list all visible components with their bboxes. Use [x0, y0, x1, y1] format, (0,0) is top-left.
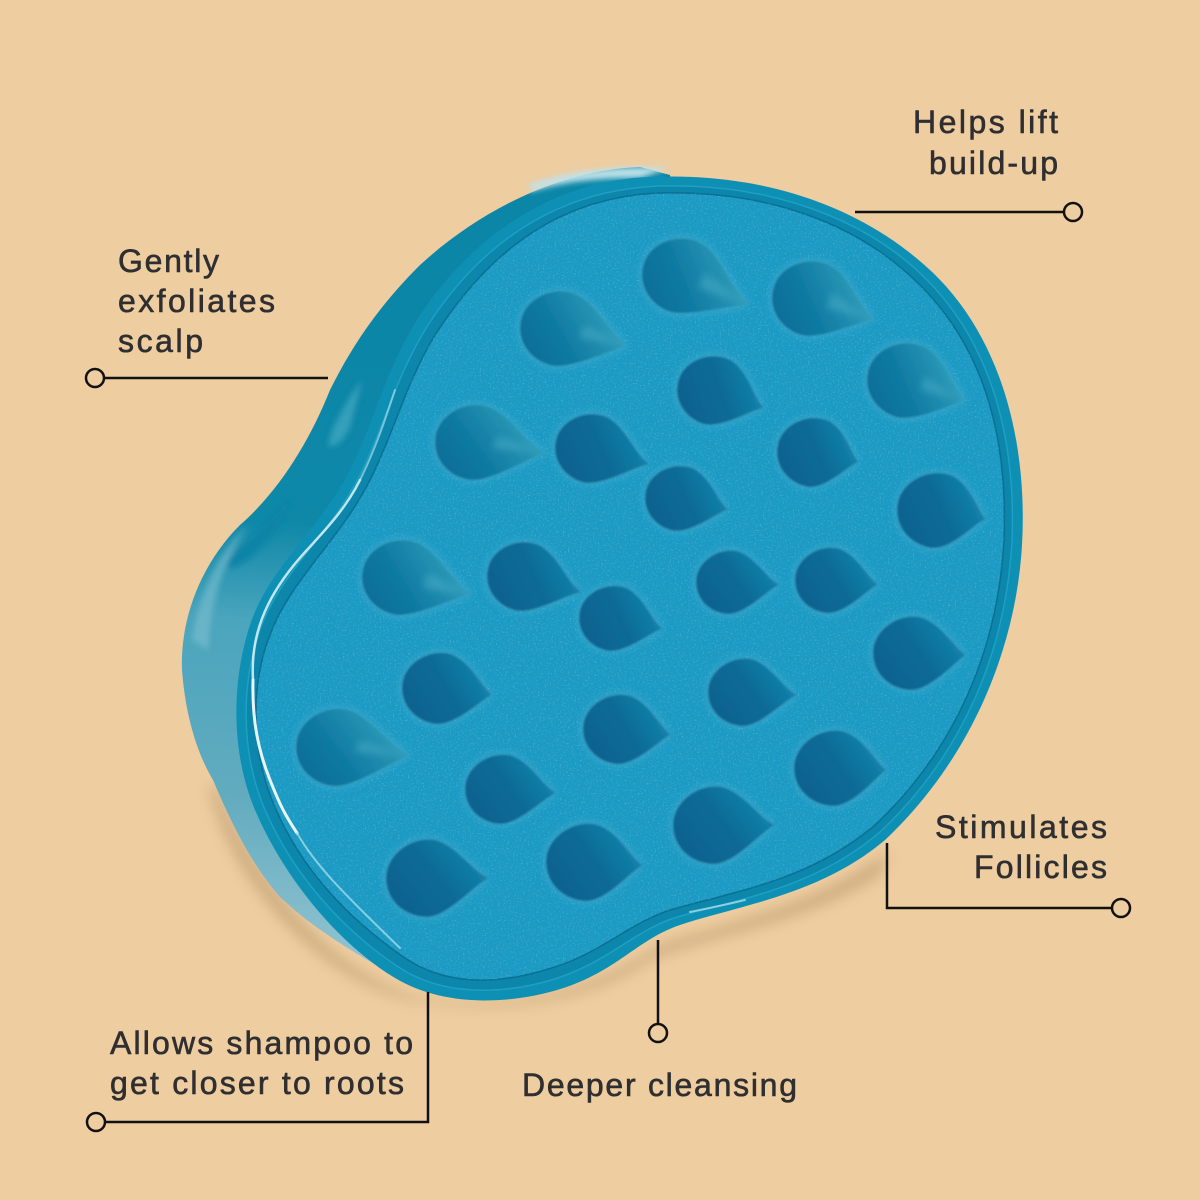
spike 1 [630, 225, 765, 340]
rim highlights [253, 390, 745, 948]
spike 16 [872, 615, 967, 692]
spike 17 [398, 648, 496, 730]
spike 7 [547, 405, 658, 498]
spike 3 [512, 282, 637, 382]
spike 2 [762, 250, 887, 355]
callout: allows shampoo closer to roots [87, 992, 428, 1131]
callout text [110, 1025, 413, 1101]
spike 21 [463, 752, 558, 828]
rim inner groove [246, 186, 1012, 990]
callout text: Allows shampoo to [110, 1025, 413, 1061]
spikes [292, 225, 992, 917]
spike 12 [479, 533, 590, 626]
spike 8 [770, 411, 865, 496]
callout text [913, 104, 1058, 181]
spike 23 [673, 786, 774, 864]
brush side wall [182, 167, 700, 985]
callout text: scalp [118, 323, 203, 359]
callout text: Helps lift [913, 104, 1058, 140]
leader line [887, 843, 1112, 908]
callout text: Follicles [974, 849, 1107, 885]
callout text: exfoliates [118, 283, 275, 319]
leader line [855, 211, 1064, 213]
callout text [935, 809, 1107, 885]
spike 5 [668, 346, 775, 441]
callout text: get closer to roots [110, 1065, 404, 1101]
spike 9 [638, 459, 735, 542]
brush: shampoo scalp massager [182, 167, 1023, 1006]
spike 11 [354, 532, 481, 631]
callout text: Stimulates [935, 809, 1107, 845]
spike 14 [792, 544, 880, 617]
spike 25 [544, 821, 644, 904]
leader line [657, 940, 659, 1024]
spike 13 [694, 549, 781, 617]
leader dot [87, 1113, 105, 1131]
face speckle texture [240, 180, 1020, 990]
rim [236, 177, 1023, 1000]
callout: deeper cleansing [522, 940, 797, 1103]
side wall highlight [192, 167, 670, 650]
spike 24 [386, 839, 488, 917]
spike 4 [857, 332, 978, 436]
brush shadow [210, 780, 890, 1006]
spike 18 [706, 656, 798, 729]
spike 10 [891, 466, 992, 556]
callout text: Deeper cleansing [522, 1067, 797, 1103]
leader dot [1112, 899, 1130, 917]
leader dot [649, 1024, 667, 1042]
leader dot [1064, 203, 1082, 221]
callout: helps lift build-up [855, 104, 1082, 221]
callout text: Gently [118, 243, 219, 279]
infographic canvas [84, 109, 1132, 1132]
spike 20 [292, 704, 415, 794]
leader dot [86, 369, 104, 387]
brush face [256, 193, 1004, 980]
spike 22 [793, 729, 887, 808]
spike 15 [573, 579, 669, 661]
callout: gently exfoliates scalp [86, 243, 328, 387]
leader line [104, 377, 328, 379]
callout text [118, 243, 275, 359]
callout: stimulates follicles [887, 809, 1130, 917]
leader line [105, 992, 428, 1122]
callout text: build-up [929, 145, 1058, 181]
spike 19 [580, 691, 674, 769]
spike highlights [354, 272, 956, 755]
spike 6 [430, 399, 552, 490]
